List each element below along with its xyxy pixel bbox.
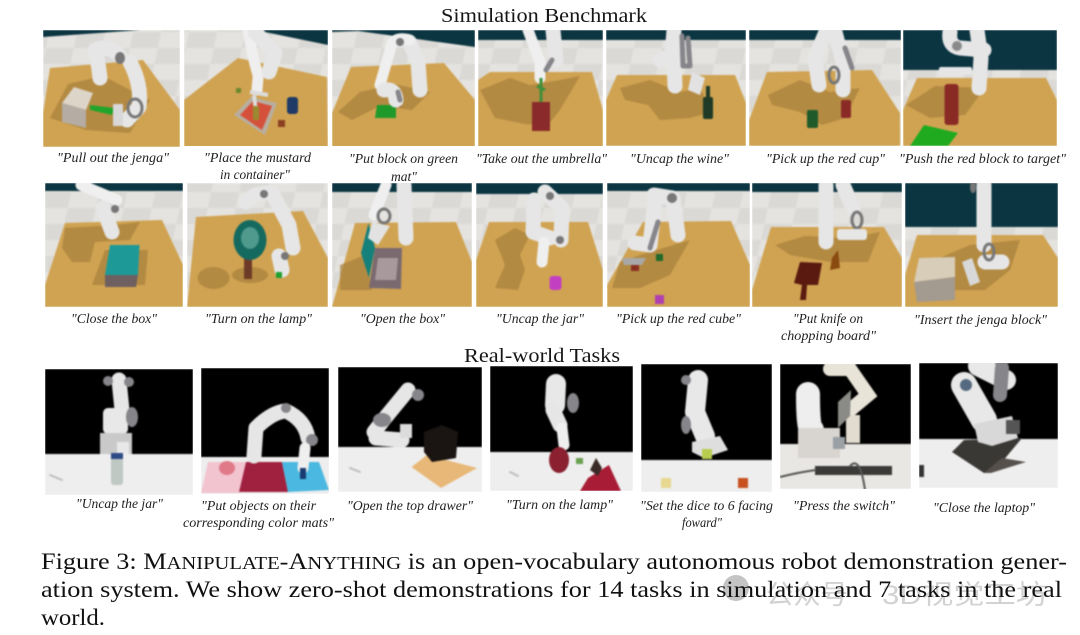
panel: pick up the red cube (607, 183, 750, 307)
watermark: 3D视觉工坊 (882, 580, 1047, 610)
panel: pick up the red cup (749, 30, 901, 146)
panel: put knife on chopping board (752, 183, 902, 307)
caption: row 1 task labels: "Uncap the wine" (630, 151, 729, 166)
caption: row 2 task labels: "Uncap the jar" (496, 311, 584, 326)
heading: Real-world Tasks: Real-world Tasks (464, 345, 620, 367)
panel: take out the umbrella (478, 30, 603, 146)
panel: real press the switch (780, 364, 911, 489)
figure caption (41, 549, 1067, 630)
panel: real set the dice to 6 (641, 364, 772, 492)
caption: row 3 task labels: "Put objects on their (201, 498, 317, 513)
figure caption: ation system. We show zero-shot demonstrations for 14 tasks in simulation and 7 tasks in the real (41, 577, 1062, 602)
caption: row 1 task labels: "Take out the umbrella" (476, 151, 607, 166)
caption: row 2 task labels: "Pick up the red cube" (616, 311, 741, 326)
caption: row 2 task labels (71, 311, 1047, 343)
caption: row 3 task labels: "Turn on the lamp" (506, 497, 613, 512)
panel: real uncap the jar (45, 369, 193, 495)
caption: row 2 task labels: "Put knife on (793, 311, 863, 326)
panel: real close the laptop (919, 363, 1058, 488)
panel: open the box (332, 183, 472, 307)
caption: row 1 task labels: "Pick up the red cup" (766, 151, 885, 166)
figure caption: world. (41, 605, 105, 630)
caption: row 3 task labels: corresponding color mats" (183, 515, 334, 530)
panel: place the mustard in container (184, 30, 328, 146)
panel: push the red block to target (903, 30, 1057, 146)
panel: pull out the jenga (43, 30, 180, 147)
caption: row 3 task labels: "Press the switch" (793, 498, 895, 513)
caption: row 3 task labels: "Set the dice to 6 facing (640, 498, 773, 513)
caption: row 3 task labels: "Uncap the jar" (76, 496, 163, 511)
caption: row 1 task labels (57, 150, 1066, 184)
panel: uncap the wine (606, 30, 746, 146)
caption: row 2 task labels: "Open the box" (360, 311, 445, 326)
caption: row 1 task labels: "Push the red block to target" (899, 151, 1066, 166)
heading: Simulation Benchmark: Simulation Benchmark (441, 5, 647, 27)
caption: row 2 task labels: chopping board" (781, 328, 876, 343)
caption: row 1 task labels: in container" (220, 167, 290, 182)
caption: row 1 task labels: "Place the mustard (204, 150, 311, 165)
watermark (723, 575, 1047, 610)
watermark: 公众号 (766, 580, 848, 610)
panel: uncap the jar (476, 183, 603, 307)
caption: row 3 task labels: foward" (682, 515, 722, 530)
caption: row 3 task labels: "Open the top drawer" (347, 498, 473, 513)
figure caption: Figure 3: M ANIPULATE -ANYTHING is an open-vocabulary autonomous robot demonstration gener- (41, 549, 1067, 574)
panel: turn on the lamp (187, 183, 328, 307)
caption: row 1 task labels: mat" (391, 169, 417, 184)
caption: row 2 task labels: "Insert the jenga block" (914, 312, 1047, 327)
caption: row 2 task labels: "Turn on the lamp" (205, 311, 312, 326)
panel: real turn on the lamp (490, 366, 633, 491)
caption: row 3 task labels: "Close the laptop" (933, 500, 1035, 515)
panel: put block on green mat (332, 30, 475, 146)
panel: real open the top drawer (338, 367, 482, 492)
panel: real put objects on color mats (201, 368, 329, 494)
panel: insert the jenga block (905, 183, 1058, 307)
caption: row 1 task labels: "Put block on green (349, 151, 458, 166)
caption: row 3 task labels (76, 496, 1035, 530)
panel: close the box (45, 183, 183, 307)
caption: row 1 task labels: "Pull out the jenga" (57, 150, 169, 165)
caption: row 2 task labels: "Close the box" (71, 311, 157, 326)
